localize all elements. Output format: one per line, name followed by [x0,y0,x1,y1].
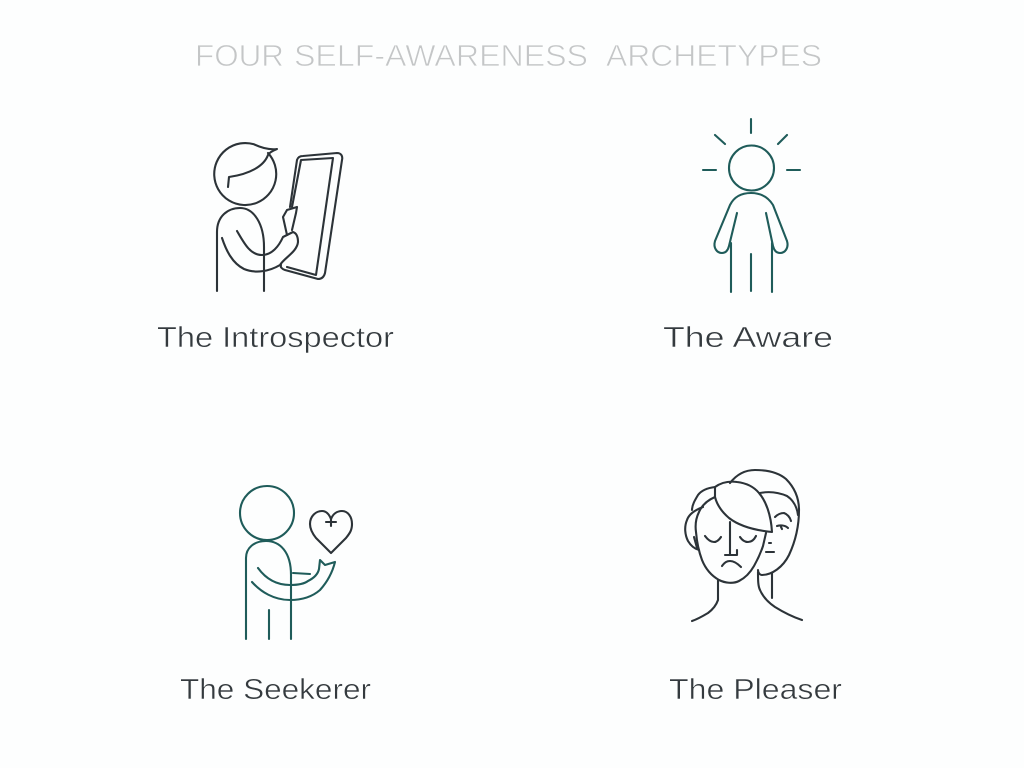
label: The Pleaser [669,674,842,706]
icon: heart [310,511,352,553]
title: SELF-AWARENESS [294,38,588,73]
panel: the introspector [157,143,394,354]
panel: the pleaser [669,470,842,706]
title: FOUR [195,38,284,73]
label: The Seekerer [180,674,371,706]
panel: the seekerer [180,486,371,706]
title: ARCHETYPES [606,38,822,73]
icon: person holding mirror [214,143,342,291]
icon: person with radiating lines [703,119,800,292]
icon: two overlapping faces [685,470,802,621]
panel: the aware [663,119,833,354]
label: The Introspector [157,322,394,354]
icon: person reaching to heart [240,486,335,639]
title [195,38,822,73]
label: The Aware [663,322,833,354]
